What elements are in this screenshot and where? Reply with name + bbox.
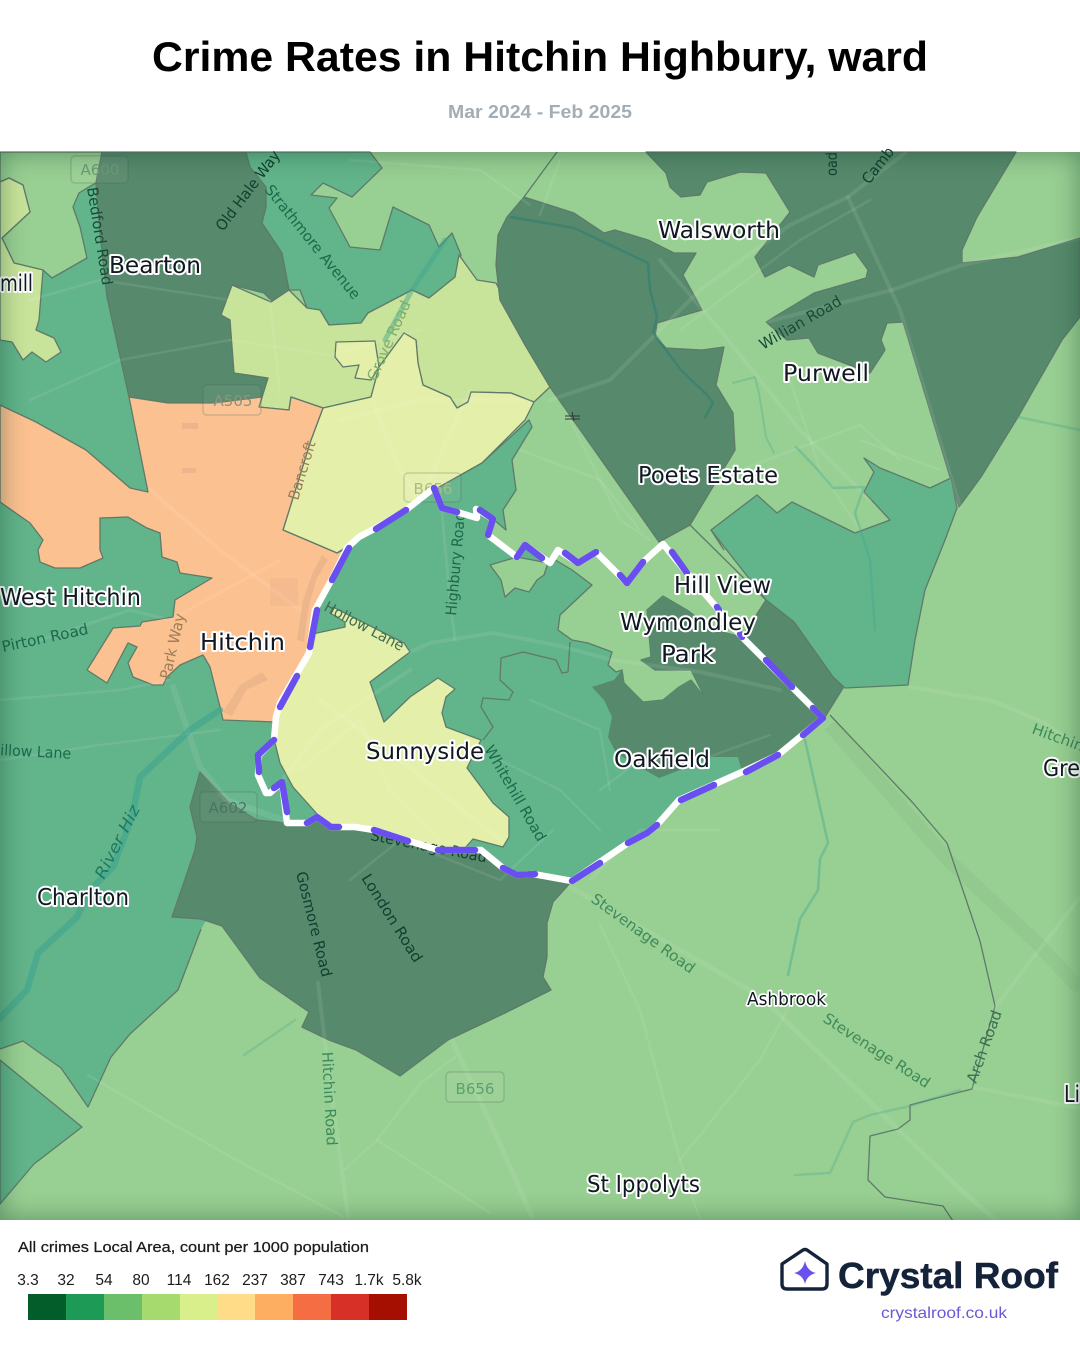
legend scale values (17, 1272, 422, 1289)
logo (782, 1250, 1059, 1322)
region: light green pocket (490, 557, 548, 597)
legend scale values: 237 (242, 1272, 268, 1289)
road label: Pirton Road: Pirton Road (0, 620, 90, 656)
ward boundary: white line (258, 488, 823, 881)
region: Bearton dark green (96, 152, 289, 403)
region: pale yellow pocket (335, 341, 379, 380)
logo url: crystalroof.co.uk (881, 1305, 1008, 1322)
footer white panel (0, 1220, 1080, 1350)
region: north-east dark green (646, 152, 1080, 507)
place: Ashbrook: Ashbrook (747, 989, 827, 1010)
ward boundary: purple dashes (258, 488, 823, 881)
road label: Highbury Road: Highbury Road (442, 511, 469, 616)
region: Highbury ward medium green (258, 488, 823, 881)
place: Poets Estate: Poets Estate (638, 463, 778, 489)
region: strip of dark green east of ward (742, 600, 843, 717)
legend scale values: 32 (57, 1272, 75, 1289)
place: Hill View: Hill View (674, 573, 771, 599)
region: south dark green (172, 772, 572, 1076)
region: Oakfield dark green (592, 596, 823, 778)
legend scale values: 114 (167, 1272, 192, 1289)
place: West Hitchin: West Hitchin (0, 585, 141, 611)
map edge shading (0, 152, 1080, 1220)
legend scale values: 387 (280, 1272, 306, 1289)
legend title: All crimes Local Area, count per 1000 population (18, 1240, 369, 1256)
road shield: B656 north (404, 473, 461, 502)
place: clipped hill label: mill (0, 271, 33, 297)
region: north medium green (246, 152, 461, 325)
road shield: B656 south: B656 (456, 1080, 494, 1098)
road label: Stevenage Road west: Stevenage Road (588, 890, 699, 977)
road labels (0, 143, 1080, 1146)
place labels (0, 218, 1080, 1198)
road shield: A602 (200, 792, 257, 822)
legend scale values: 3.3 (17, 1272, 39, 1289)
title: Crime Rates in Hitchin Highbury, ward (152, 33, 928, 80)
road label: Cambridge Road clipped: Camb (858, 143, 898, 187)
road label: Bancroft: Bancroft (285, 438, 320, 502)
region: Wymondley light green (552, 544, 742, 702)
town centre building marks (182, 423, 328, 716)
legend scale values: 80 (132, 1272, 150, 1289)
outline: south-west boundary (0, 929, 201, 1107)
region: west medium green (0, 152, 300, 1107)
region: medium green north-east wedge (434, 420, 532, 530)
place: Purwell: Purwell (783, 361, 869, 387)
road label: Willow Lane clipped: illow Lane (0, 741, 72, 763)
region: south-west medium green (0, 1060, 82, 1204)
legend scale values: 54 (95, 1272, 113, 1289)
water label: River Hiz: River Hiz (91, 801, 144, 882)
region: Poets Estate dark green (496, 197, 735, 542)
road label: Gosmore Road: Gosmore Road (292, 870, 336, 979)
legend scale values: 743 (318, 1272, 344, 1289)
legend scale values: 1.7k (354, 1272, 384, 1289)
road label: Bedford Road: Bedford Road (83, 186, 116, 286)
place: Wymondley: Wymondley (620, 610, 756, 636)
map base: light green area (0, 152, 1080, 1220)
legend (17, 1240, 422, 1320)
legend scale values: 162 (204, 1272, 230, 1289)
railway band (830, 725, 1080, 989)
place: Hitchin: Hitchin (200, 630, 285, 656)
road label: Willian Road: Willian Road (756, 292, 845, 353)
rivers and streams (0, 217, 1080, 1175)
road label: Grove Road: Grove Road (363, 298, 415, 384)
road shield: B656 south (446, 1072, 504, 1102)
road label: Strathmore Avenue: Strathmore Avenue (261, 181, 364, 303)
region: pale yellow north of ward (283, 333, 534, 553)
road label: Stevenage Road east: Stevenage Road (820, 1009, 934, 1092)
region: Sunnyside pale yellow (275, 607, 509, 850)
road label: Stevenage Road under ward line: Stevenage Road (369, 826, 489, 866)
region: far-west yellow green (0, 178, 61, 362)
place: Charlton: Charlton (37, 885, 129, 911)
road label: Hitchin Road: Hitchin Road (318, 1051, 341, 1146)
place: Sunnyside: Sunnyside (366, 739, 484, 765)
road label: Hollow Lane: Hollow Lane (321, 598, 407, 655)
subtitle: date range: Mar 2024 - Feb 2025 (448, 101, 632, 122)
road shield: A602: A602 (209, 799, 247, 817)
road shield: A505 (203, 385, 261, 415)
place: Oakfield: Oakfield (614, 747, 710, 773)
legend scale values: 5.8k (392, 1272, 422, 1289)
logo icon: house with star (782, 1250, 827, 1289)
logo wordmark: Crystal Roof (838, 1255, 1059, 1296)
road shield: A600 (71, 156, 128, 183)
region: Grove Road yellow green (221, 255, 550, 410)
place: Bearton: Bearton (109, 253, 201, 279)
region: north-west light green (0, 152, 102, 278)
road label: Whitehill Road: Whitehill Road (481, 742, 550, 845)
road label: Old Hale Way: Old Hale Way (212, 147, 284, 234)
road label: clipped road top: oad (823, 152, 841, 176)
region: east medium green (711, 458, 957, 688)
place: St Ippolyts: St Ippolyts (587, 1172, 700, 1198)
road shield: A600: A600 (81, 161, 119, 179)
road network (0, 153, 1080, 1224)
road label: Arch Road: Arch Road (963, 1008, 1006, 1085)
road label: Park Way: Park Way (156, 611, 189, 681)
internal ward boundary lines (481, 152, 995, 1224)
place: Park: Park (661, 642, 715, 668)
region: Hitchin town centre orange (0, 397, 347, 722)
legend colour bar (28, 1294, 407, 1320)
road shield: B656 north: B656 (414, 480, 452, 498)
rail crossing mark (565, 412, 580, 421)
road label: London Road: London Road (358, 871, 426, 966)
road shield: A505: A505 (214, 392, 252, 410)
place: Walsworth: Walsworth (658, 218, 780, 244)
